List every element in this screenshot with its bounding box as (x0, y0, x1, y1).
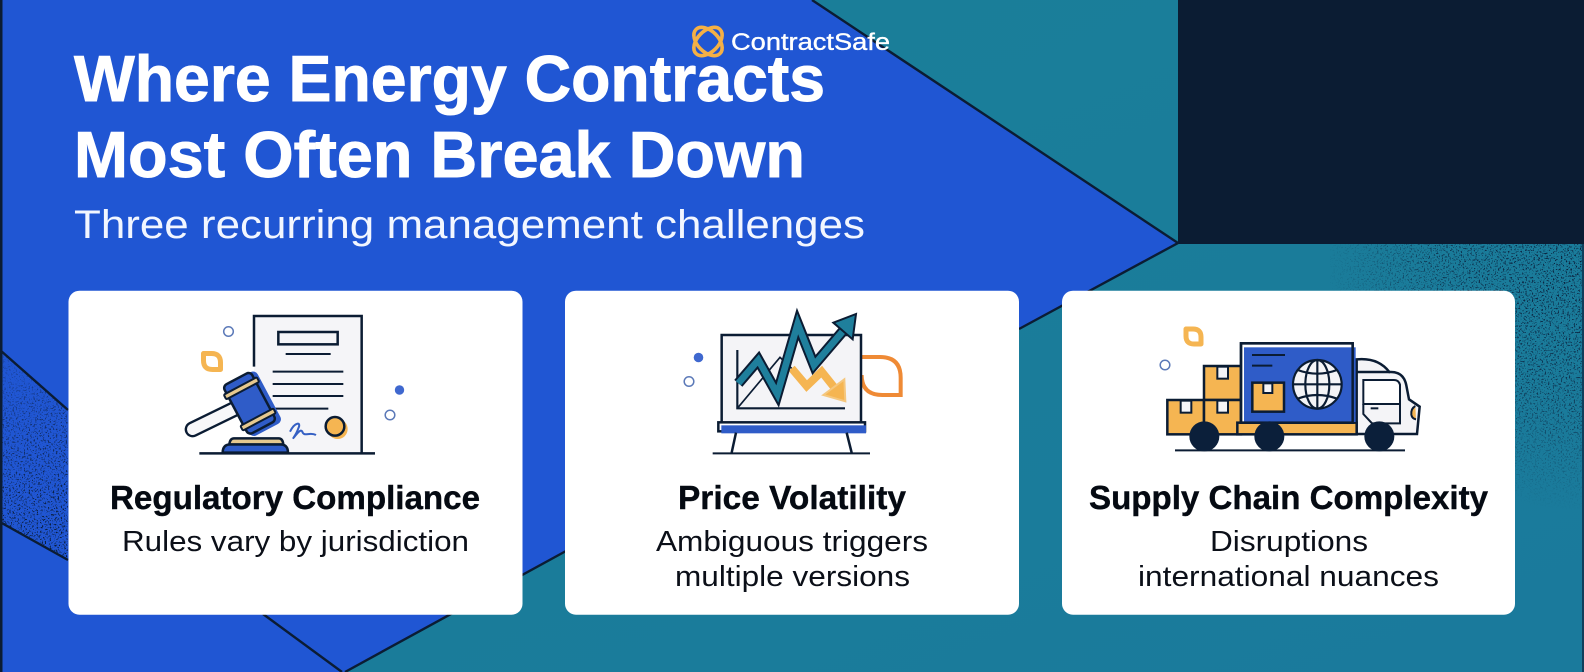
icon: blue dot (395, 385, 404, 395)
card description (1138, 526, 1439, 593)
card description: multiple versions (675, 561, 910, 593)
card heading: Regulatory Compliance (110, 479, 480, 516)
icon: ring right (385, 410, 395, 420)
title: Where Energy Contracts (74, 42, 825, 115)
card description: Rules vary by jurisdiction (122, 526, 469, 558)
icon: ring top left (224, 327, 233, 336)
card description (656, 526, 928, 593)
background: teal speckle texture (1336, 244, 1582, 498)
background: blue speckle texture (0, 350, 68, 560)
subtitle: Three recurring management challenges (74, 203, 865, 247)
card description: international nuances (1138, 561, 1439, 593)
orange leaf callout (862, 357, 901, 395)
left edge stripe (0, 0, 2, 672)
background: large blue polygon (0, 0, 1178, 672)
icon: blue dot (694, 353, 703, 362)
logo icon (689, 22, 727, 61)
title (74, 42, 825, 191)
right edge stripe (1582, 244, 1584, 672)
icon: contract and gavel (190, 316, 375, 453)
icon: ring (1160, 360, 1170, 370)
card description: Disruptions (1210, 526, 1368, 558)
icon: chart board (713, 314, 901, 453)
icon: ring (684, 377, 694, 386)
icon: delivery truck (1167, 343, 1420, 451)
title: Most Often Break Down (74, 118, 805, 191)
icon: orange leaf (204, 354, 220, 370)
panel: regulatory compliance (68, 291, 522, 615)
logo wordmark: ContractSafe (731, 29, 890, 56)
card heading: Price Volatility (678, 479, 907, 516)
card description: Ambiguous triggers (656, 526, 928, 558)
background: navy polygon edge lines (0, 0, 1178, 672)
icon: orange leaf (1186, 329, 1201, 344)
background: dark navy corner block (1178, 0, 1584, 244)
panel: price volatility (565, 291, 1019, 615)
logo: ContractSafe (689, 22, 890, 61)
panel: supply chain complexity (1062, 291, 1515, 615)
card heading: Supply Chain Complexity (1089, 479, 1489, 516)
